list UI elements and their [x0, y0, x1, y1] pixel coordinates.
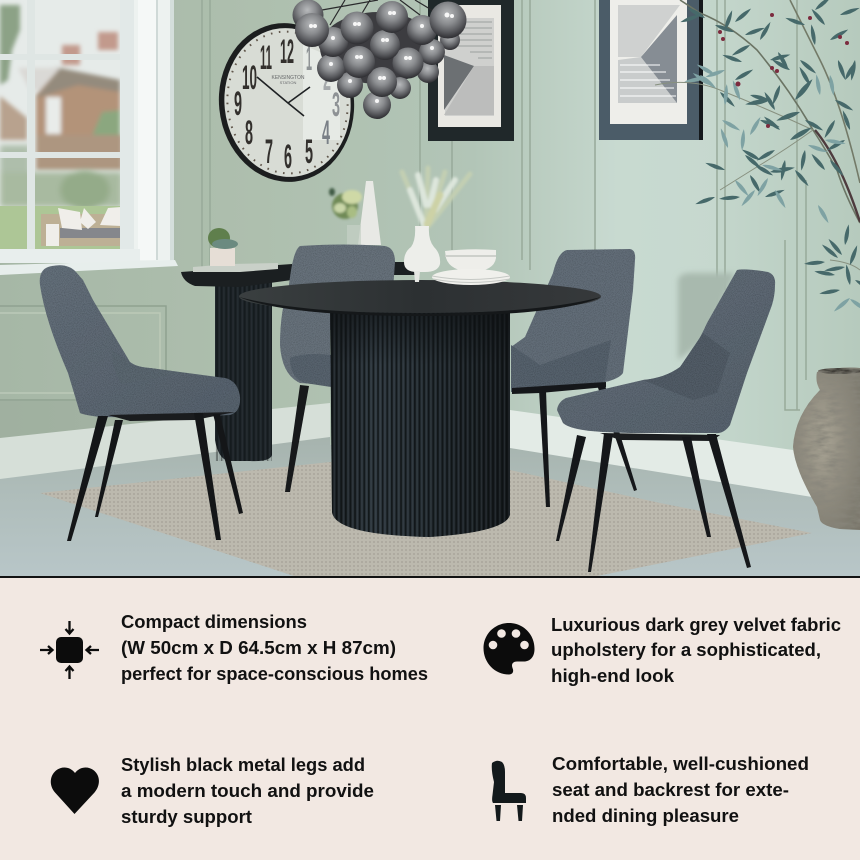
floor — [0, 430, 860, 576]
baseboard left — [0, 403, 330, 479]
table pedestal — [330, 305, 510, 537]
feature: comfortable cushions — [492, 754, 809, 826]
text: metal legs — [121, 755, 374, 827]
potted succulent — [208, 228, 238, 266]
text: compact dimensions — [121, 612, 428, 684]
pot — [793, 368, 860, 530]
text: compact dimensions: (W 50cm x D 64.5cm x H 87cm) — [121, 638, 396, 658]
wall — [0, 0, 860, 480]
tall white vase with flowers — [329, 181, 381, 245]
text: comfortable cushions: Comfortable, well-cushioned — [552, 754, 809, 774]
icon: chair — [492, 761, 526, 821]
back right chair legs — [512, 382, 637, 507]
feature: metal legs — [51, 755, 374, 827]
chair legs — [556, 433, 751, 572]
olive plant — [655, 0, 860, 313]
clock numerals: 11 — [260, 39, 272, 77]
plates and bowls — [432, 249, 510, 285]
clock numerals: 6 — [284, 138, 292, 176]
feature: compact dimensions — [40, 612, 428, 684]
text: metal legs: Stylish black metal legs add — [121, 755, 365, 775]
baseboard right — [510, 410, 812, 497]
clock numerals: 10 — [242, 59, 257, 97]
clock hands — [257, 77, 310, 116]
table top — [239, 280, 601, 313]
text: compact dimensions: Compact dimensions — [121, 612, 307, 632]
back right chair — [511, 249, 635, 392]
framed art right — [599, 0, 703, 140]
framed art left — [428, 0, 514, 141]
text: velvet fabric: Luxurious dark grey velvet fabric — [551, 615, 841, 635]
photo: dining room scene — [0, 0, 860, 576]
text: comfortable cushions: seat and backrest for exte- — [552, 780, 789, 800]
clock: KENSINGTON — [272, 75, 305, 81]
clock: STATION — [280, 80, 296, 85]
back left chair — [280, 244, 395, 387]
clock numerals: 7 — [265, 133, 273, 171]
vase on table — [402, 168, 470, 282]
chandelier — [292, 0, 466, 119]
text: velvet fabric: high-end look — [551, 666, 675, 686]
wall panel mouldings — [0, 0, 806, 450]
window frame bars — [0, 0, 178, 275]
feature: velvet fabric — [484, 615, 841, 686]
table — [239, 280, 601, 537]
text: metal legs: a modern touch and provide — [121, 781, 374, 801]
clock numerals: 8 — [245, 114, 253, 152]
clock numerals: 2 — [323, 60, 331, 98]
icon: heart — [51, 767, 99, 814]
clock: 3 — [332, 86, 340, 124]
front left chair — [40, 265, 243, 541]
text: metal legs: sturdy support — [121, 807, 252, 827]
clock numerals: 1 — [306, 40, 312, 78]
text: comfortable cushions: nded dining pleasure — [552, 806, 739, 826]
chair legs — [67, 413, 243, 541]
window — [0, 0, 178, 275]
text: velvet fabric — [551, 615, 841, 686]
clock numerals: 9 — [234, 85, 242, 123]
clock numerals: 4 — [322, 114, 330, 152]
text: comfortable cushions — [552, 754, 809, 826]
clock — [211, 16, 362, 189]
feature panel — [0, 578, 860, 860]
text: velvet fabric: upholstery for a sophisticated, — [551, 640, 821, 660]
clock numerals: 12 — [280, 33, 294, 71]
front right chair — [556, 269, 775, 572]
magazines — [193, 263, 278, 272]
back left chair leg — [285, 385, 309, 492]
text: compact dimensions: perfect for space-conscious homes — [121, 664, 428, 684]
divider line — [0, 576, 860, 578]
clock numerals — [234, 33, 340, 176]
console table — [181, 228, 415, 461]
icon: palette — [484, 623, 534, 674]
clock numerals: 5 — [305, 133, 313, 171]
icon: arrows pointing to square — [40, 621, 99, 679]
rug — [40, 462, 812, 576]
